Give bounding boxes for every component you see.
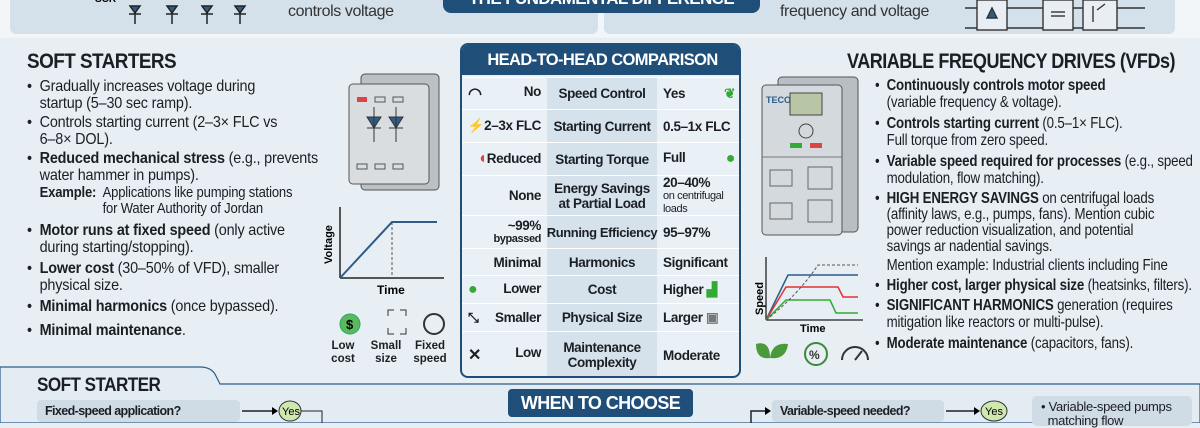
panel: head-to-head comparison table: on centrifugal loads [663, 190, 723, 214]
text block: soft starter bullets: Controls starting current (2–3× FLC vs [40, 114, 277, 131]
icons: low cost, small size, fixed speed: $ [346, 317, 354, 332]
text block: soft starter bullets: for Water Authority of Jordan [103, 201, 263, 217]
text block: soft starter bullets: Minimal harmonics (once bypassed). [40, 298, 278, 315]
text block: soft starter bullets: physical size. [40, 277, 123, 294]
text block: VFD bullets: (variable frequency & voltage). [887, 94, 1062, 111]
text block: VFD bullets: SIGNIFICANT HARMONICS generation (requires [887, 297, 1173, 314]
chart: speed vs time: Speed [754, 282, 766, 315]
text block: soft starter bullets: water hammer in pumps). [40, 167, 199, 184]
panel: head-to-head comparison table: Lower [503, 280, 541, 296]
text block: VFD bullets: HIGH ENERGY SAVINGS on centrifugal loads [887, 190, 1154, 207]
panel: head-to-head comparison table: ✕ [468, 347, 481, 364]
icons: low cost, small size, fixed speed: Low cost [331, 340, 355, 364]
text: frequency and voltage: frequency and voltage [780, 3, 929, 20]
panel: head-to-head comparison table: ● [726, 150, 735, 167]
text block: VFD bullets: Controls starting current (0.5–1× FLC). [887, 115, 1123, 132]
panel: head-to-head comparison table: Harmonics [569, 254, 635, 270]
title: the fundamental difference [443, 0, 760, 13]
heading: soft starters: SOFT STARTERS [27, 50, 176, 73]
icon: VFD device: TECO [766, 95, 791, 105]
panel: head-to-head comparison table: Maintenance Complexity [563, 340, 641, 370]
text block: soft starter bullets: Minimal maintenance. [40, 322, 186, 339]
panel: head-to-head comparison table [460, 43, 741, 378]
panel: head-to-head comparison table: Physical Size [562, 310, 642, 325]
panel: head-to-head comparison table: ⚡2–3x FLC [468, 118, 541, 133]
text block: soft starter bullets: during starting/stopping). [40, 239, 193, 256]
text block: VFD bullets [876, 77, 1193, 352]
panel: head-to-head comparison table: Starting Current [553, 118, 651, 134]
panel: head-to-head comparison table: None [509, 188, 541, 203]
icons: leaf, percent, gauge: % [809, 348, 820, 362]
panel: head-to-head comparison table: ~99% [508, 218, 541, 232]
text block: VFD bullets: mitigation like reactors or multi-pulse). [887, 314, 1103, 331]
text block: VFD bullets: Moderate maintenance (capacitors, fans). [887, 335, 1133, 352]
heading: variable frequency drives: VARIABLE FREQUENCY DRIVES (VFDs) [847, 50, 1175, 73]
panel: head-to-head comparison table: Moderate [663, 348, 720, 362]
panel: head-to-head comparison table: ◠ [468, 86, 482, 102]
icons: low cost, small size, fixed speed: Fixed speed [413, 340, 447, 364]
chart: voltage ramp: Time [377, 283, 405, 297]
panel: head-to-head comparison table: Smaller [495, 310, 541, 324]
text block: VFD bullets: Continuously controls motor speed [887, 77, 1105, 94]
text block: VFD bullets: modulation, flow matching). [887, 170, 1044, 187]
heading: soft starter: SOFT STARTER [37, 375, 160, 396]
box: fixed-speed application [37, 400, 240, 422]
panel: head-to-head comparison table: Minimal [494, 254, 541, 270]
box: variable-speed needed: Variable-speed needed? [780, 404, 910, 418]
panel: head-to-head comparison table: Cost [588, 282, 616, 297]
text block: soft starter bullets: Applications like pumping stations [103, 185, 292, 201]
heading: when to choose [508, 389, 693, 417]
chart: speed vs time [754, 257, 863, 335]
panel: head-to-head comparison table: 0.5–1x FLC [663, 118, 730, 134]
chart: speed vs time: Time [800, 323, 825, 335]
chart: voltage ramp [323, 207, 444, 297]
text block: soft starter bullets: startup (5–30 sec ramp). [40, 95, 192, 112]
panel: head-to-head comparison table: 20–40% [663, 174, 710, 190]
text block: soft starter bullets: Lower cost (30–50% of VFD), smaller [40, 260, 279, 277]
panel: head-to-head comparison table: Energy Savings at Partial Load [554, 180, 650, 210]
panel: head-to-head comparison table: Larger ▣ [663, 310, 718, 324]
box: variable-speed pumps [1032, 396, 1192, 426]
panel: head-to-head comparison table: Speed Control [558, 86, 646, 101]
arrow: into variable-speed [750, 407, 771, 423]
panel: head-to-head comparison table: ● [468, 280, 477, 298]
text block: soft starter bullets: Example: [40, 185, 96, 201]
text: controls voltage: controls voltage [288, 3, 394, 20]
text block: soft starter bullets: Reduced mechanical stress (e.g., prevents [40, 150, 318, 167]
box: variable-speed needed [772, 400, 944, 422]
panel: head-to-head comparison table: ❦ [724, 86, 735, 100]
box: fixed-speed application: Fixed-speed application? [45, 404, 181, 418]
panel: head-to-head comparison table: Running Efficiency [547, 224, 657, 240]
text block: soft starter bullets: 6–8× DOL). [40, 131, 113, 148]
panel: head-to-head comparison table: ◖Reduced [478, 150, 541, 167]
icons: low cost, small size, fixed speed: Small size [371, 340, 401, 364]
text block: VFD bullets: Mention example: Industrial clients including Fine [887, 257, 1168, 274]
text block: VFD bullets: Higher cost, larger physical size (heatsinks, filters). [887, 277, 1192, 294]
panel: head-to-head comparison table: Higher ▟ [663, 282, 717, 296]
panel: bottom when-to-choose section [0, 366, 1200, 423]
arrow and yes right [946, 400, 1008, 422]
text block: soft starter bullets [28, 78, 318, 339]
heading: head-to-head comparison [462, 45, 743, 75]
icon: SCR symbols [95, 0, 246, 24]
text block: VFD bullets: power reduction visualization, and potential [887, 222, 1133, 239]
text block: VFD bullets: Full torque from zero speed. [887, 132, 1048, 149]
arrow and yes [242, 400, 322, 423]
text block: VFD bullets: savings ar nadential savings. [887, 238, 1052, 255]
text block: VFD bullets: Variable speed required for processes (e.g., speed [887, 153, 1193, 170]
top strip background [0, 0, 1200, 38]
text block: soft starter bullets: Gradually increases voltage during [40, 78, 255, 95]
icons: low cost, small size, fixed speed [331, 310, 447, 364]
panel: head-to-head comparison table: ⤡ [468, 310, 478, 324]
panel: head-to-head comparison table: No [524, 84, 541, 98]
heading: when to choose: WHEN TO CHOOSE [521, 393, 680, 413]
icon: VFD device [762, 76, 858, 236]
icons: leaf, percent, gauge [756, 342, 869, 366]
panel: head-to-head comparison table: Starting Torque [555, 152, 649, 166]
panel: top right [604, 0, 1175, 34]
text block: soft starter bullets: Motor runs at fixed speed (only active [40, 222, 285, 239]
heading: head-to-head comparison: HEAD-TO-HEAD COMPARISON [487, 51, 718, 69]
panel: head-to-head comparison table: Significant [663, 254, 728, 270]
box: variable-speed pumps: • Variable-speed pumps [1041, 399, 1172, 414]
panel: top left [10, 0, 598, 34]
arrow and yes: Yes [282, 406, 300, 418]
arrow and yes right: Yes [985, 406, 1003, 418]
icon: soft starter device [348, 74, 440, 190]
icon: VFD circuit blocks [965, 0, 1145, 31]
panel: head-to-head comparison table: Yes [663, 86, 685, 100]
box: variable-speed pumps: matching flow [1048, 413, 1123, 428]
panel: head-to-head comparison table: Low [515, 345, 541, 360]
panel: head-to-head comparison table: Full [663, 150, 685, 165]
panel: head-to-head comparison table: bypassed [493, 232, 541, 244]
chart: voltage ramp: Voltage [323, 225, 335, 264]
text block: VFD bullets: (affinity laws, e.g., pumps, fans). Mention cubic [887, 206, 1154, 223]
panel: head-to-head comparison table: 95–97% [663, 224, 710, 240]
